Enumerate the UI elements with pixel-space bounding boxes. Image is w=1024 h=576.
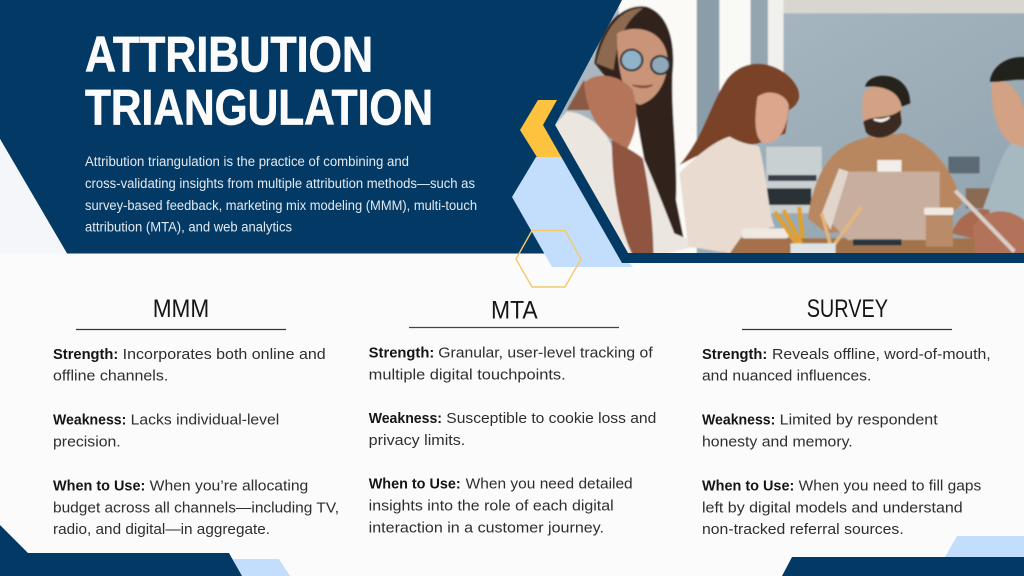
heading: MTA: MTA — [491, 296, 538, 324]
navy chevron stripe — [543, 0, 1024, 263]
hero navy panel — [0, 0, 622, 263]
MMM when to use — [53, 478, 339, 538]
light blue hexagon shape — [512, 157, 633, 267]
laptop — [822, 168, 940, 245]
MMM strength — [53, 347, 326, 385]
MTA weakness: privacy limits. — [369, 433, 465, 449]
MMM strength: Strength: — [53, 347, 118, 363]
MTA strength — [369, 346, 654, 384]
MTA when to use: insights into the role of each digital — [369, 499, 614, 515]
MTA strength: multiple digital touchpoints. — [369, 368, 566, 384]
MTA strength: Strength: — [369, 346, 434, 362]
corner background wedge — [0, 139, 67, 254]
pencils — [775, 207, 862, 255]
MTA when to use: interaction in a customer journey. — [369, 521, 604, 537]
SURVEY when to use: left by digital models and understand — [702, 500, 963, 516]
MTA when to use — [369, 477, 633, 537]
SURVEY strength: and nuanced influences. — [702, 369, 871, 385]
SURVEY strength — [702, 347, 991, 385]
title: ATTRIBUTION — [85, 26, 373, 82]
MMM weakness — [53, 413, 279, 451]
ceiling — [775, 0, 1024, 13]
SURVEY strength: Strength: — [702, 347, 767, 363]
MMM strength: Incorporates both online and — [123, 347, 326, 363]
intro paragraph: Attribution triangulation is the practice of combining and — [85, 154, 409, 169]
SURVEY strength: Reveals offline, word-of-mouth, — [772, 347, 991, 363]
MMM when to use: When you’re allocating — [150, 478, 308, 494]
SURVEY when to use: When to Use: — [702, 478, 794, 494]
MMM when to use: radio, and digital—in aggregate. — [53, 522, 270, 538]
bottom-left corner shapes — [0, 525, 290, 576]
woman with glasses — [555, 6, 702, 255]
MTA strength: Granular, user-level tracking of — [438, 346, 654, 362]
MTA when to use: When to Use: — [369, 477, 461, 493]
MMM weakness: Weakness: — [53, 413, 126, 429]
intro paragraph: cross-validating insights from multiple attribution methods—such as — [85, 176, 475, 191]
heading: MMM: MMM — [153, 295, 209, 323]
coffee cups — [741, 206, 955, 247]
MMM strength: offline channels. — [53, 369, 168, 385]
MMM weakness: Lacks individual-level — [131, 413, 279, 429]
intro paragraph: attribution (MTA), and web analytics — [85, 220, 292, 234]
woman with red hair — [679, 64, 799, 253]
photo: team around a laptop — [550, 0, 1024, 260]
SURVEY weakness: Limited by respondent — [780, 413, 938, 429]
MTA weakness: Susceptible to cookie loss and — [446, 411, 656, 427]
MTA when to use: When you need detailed — [466, 477, 633, 493]
table — [722, 237, 977, 253]
MMM when to use: budget across all channels—including TV, — [53, 500, 339, 516]
man with tablet — [952, 57, 1024, 255]
SURVEY weakness: honesty and memory. — [702, 435, 853, 451]
MMM when to use: When to Use: — [53, 478, 145, 494]
intro paragraph — [85, 154, 477, 234]
SURVEY when to use: non-tracked referral sources. — [702, 522, 904, 538]
yellow chevron — [520, 100, 566, 162]
panel: MTA — [369, 296, 656, 537]
heading: SURVEY: SURVEY — [807, 295, 888, 323]
panel: SURVEY — [702, 295, 991, 538]
windows — [619, 0, 784, 257]
outlined hexagon — [516, 230, 581, 287]
bottom-right corner shapes — [782, 536, 1024, 576]
MMM weakness: precision. — [53, 435, 121, 451]
title — [85, 26, 433, 136]
SURVEY weakness: Weakness: — [702, 413, 775, 429]
bearded man — [808, 76, 962, 233]
panel: MMM — [53, 295, 339, 538]
MTA weakness: Weakness: — [369, 411, 442, 427]
SURVEY weakness — [702, 413, 938, 451]
intro paragraph: survey-based feedback, marketing mix modeling (MMM), multi-touch — [85, 198, 477, 213]
title: TRIANGULATION — [85, 80, 433, 136]
shelves — [766, 147, 990, 213]
SURVEY when to use: When you need to fill gaps — [799, 478, 981, 494]
SURVEY when to use — [702, 478, 981, 538]
MTA weakness — [369, 411, 656, 449]
